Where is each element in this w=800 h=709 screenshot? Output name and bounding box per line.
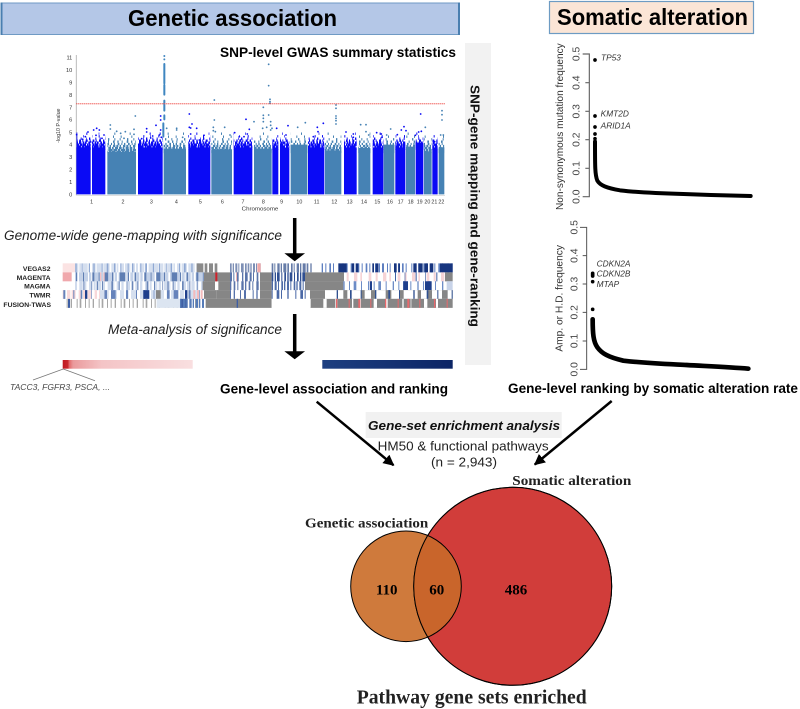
steel-blue chromosome columns (107, 145, 444, 194)
axis numbers: 0 (69, 192, 72, 198)
chart: non-synonymous mutation frequency: 0.0 (571, 189, 582, 204)
x axis title: Chromosome (242, 207, 278, 213)
panel: gene-set enrichment analysis (366, 412, 562, 470)
chromosome labels: 15 (374, 200, 380, 206)
chart: amplification or homozygous deletion frequency: CDKN2A (597, 258, 631, 268)
row: VEGAS2 (63, 254, 453, 281)
chart: amplification or homozygous deletion frequency: Amp. or H.D. frequency (554, 244, 565, 352)
row: MAGENTA (63, 263, 453, 290)
side panel: SNP-gene mapping and gene-ranking: SNP-gene mapping and gene-ranking (468, 85, 482, 327)
chromosome labels: 20 (424, 200, 430, 206)
row: FUSION-TWAS (67, 290, 453, 317)
chart: non-synonymous mutation frequency: TP53 (601, 53, 621, 63)
chromosome labels: 6 (221, 200, 224, 206)
ranking bar: top genes (63, 360, 193, 369)
axis numbers: 1 (69, 180, 72, 186)
heatmap labels: MAGMA (24, 284, 51, 291)
chromosome labels: 9 (280, 200, 283, 206)
heatmap labels: MAGENTA (17, 275, 51, 282)
axis numbers: 8 (69, 93, 72, 99)
axis numbers: 5 (69, 130, 72, 136)
chart: amplification or homozygous deletion frequency: 0.3 (570, 277, 581, 291)
y axis title: -log10 P-value (56, 108, 62, 143)
text: Gene-level association and ranking: Gene-level association and ranking (220, 382, 448, 396)
venn label: Genetic association: Genetic association (305, 517, 429, 532)
axis numbers: 10 (66, 68, 72, 74)
ranking bar: bottom genes (322, 360, 453, 369)
chart: amplification or homozygous deletion frequency: 0.4 (570, 248, 581, 263)
speckled tops of steel columns (76, 134, 444, 152)
chromosome labels: 21 (431, 200, 437, 206)
heatmap labels: VEGAS2 (23, 266, 51, 273)
chromosome labels: 3 (150, 200, 153, 206)
chromosome labels: 18 (408, 200, 414, 206)
genome-wide significance line (76, 102, 445, 106)
chromosome labels: 16 (387, 200, 393, 206)
panel: gene-set enrichment analysis: (n = 2,943) (431, 455, 497, 470)
axis numbers: 7 (69, 105, 72, 111)
chart: non-synonymous mutation frequency: 0.2 (571, 132, 582, 147)
heatmap labels: TWMR (29, 293, 51, 300)
chromosome labels: 5 (199, 200, 202, 206)
chart: amplification or homozygous deletion frequency: 0.1 (570, 334, 581, 348)
chart: non-synonymous mutation frequency: 0.3 (571, 104, 582, 119)
scattered points above blue columns (77, 114, 435, 143)
venn diagram: 110 (376, 582, 398, 598)
venn diagram (351, 487, 612, 685)
row: MAGMA (75, 272, 453, 299)
venn diagram: 486 (505, 582, 528, 598)
chromosome labels: 4 (175, 200, 178, 206)
chart: non-synonymous mutation frequency: KMT2D (601, 108, 629, 118)
chromosome labels: 8 (262, 200, 265, 206)
chart: amplification or homozygous deletion frequency (554, 220, 748, 377)
blue chromosome columns (76, 143, 438, 194)
row: TWMR (63, 281, 453, 308)
arrow: mapping to ranking (290, 314, 300, 357)
text: top genes: TACC3, FGFR3, PSCA, ... (10, 383, 110, 392)
axis numbers: 9 (69, 80, 72, 86)
panel: gene-set enrichment analysis: HM50 & functional pathways (378, 439, 549, 454)
chromosome labels: 10 (296, 200, 302, 206)
chromosome labels: 19 (417, 200, 423, 206)
heading: SNP-level GWAS summary statistics: SNP-level GWAS summary statistics (220, 44, 456, 60)
text: Meta-analysis of significance: Meta-analysis of significance (108, 322, 282, 337)
chart: non-synonymous mutation frequency: 0.5 (571, 47, 582, 61)
callout lines to top genes (33, 369, 95, 381)
scattered points above steel columns (110, 64, 443, 138)
side panel: SNP-gene mapping and gene-ranking (465, 43, 491, 365)
chart: amplification or homozygous deletion frequency: 0.0 (570, 362, 581, 377)
chromosome labels: 11 (314, 200, 319, 206)
header: Somatic alteration: Somatic alteration (557, 4, 748, 30)
chart: amplification or homozygous deletion frequency: MTAP (597, 279, 620, 289)
chart: amplification or homozygous deletion frequency: 0.2 (570, 305, 581, 320)
chart: amplification or homozygous deletion frequency: CDKN2B (597, 269, 631, 279)
axis numbers: 4 (69, 143, 72, 149)
heatmap of gene-level significance (63, 268, 453, 303)
chromosome labels: 12 (331, 200, 337, 206)
arrow: GWAS to gene mapping (290, 218, 300, 259)
chart: non-synonymous mutation frequency: 0.1 (571, 161, 582, 176)
heatmap labels (3, 266, 51, 309)
caption: Pathway gene sets enriched: Pathway gene sets enriched (357, 686, 587, 708)
chromosome labels: 7 (242, 200, 245, 206)
arrow: somatic to enrichment (535, 401, 612, 464)
panel: gene-set enrichment analysis: Gene-set enrichment analysis (368, 418, 560, 433)
text: Gene-level ranking by somatic alteration rate: Gene-level ranking by somatic alteration rate (508, 381, 798, 396)
chart: Manhattan plot (56, 55, 445, 213)
chromosome labels: 22 (438, 200, 444, 206)
chart: non-synonymous mutation frequency: 0.4 (571, 75, 582, 90)
chromosome labels: 17 (398, 200, 404, 206)
chart: non-synonymous mutation frequency: ARID1A (600, 121, 631, 131)
chart: non-synonymous mutation frequency (555, 43, 751, 210)
arrow: association to enrichment (317, 402, 394, 465)
chromosome labels: 13 (347, 200, 353, 206)
text: Genome-wide gene-mapping with significance: Genome-wide gene-mapping with significance (4, 228, 282, 243)
axis numbers: 3 (69, 155, 72, 161)
chromosome labels (90, 200, 444, 206)
header: Genetic association (2, 2, 459, 35)
chart: non-synonymous mutation frequency: Non-synonymous mutation frequency (555, 43, 566, 210)
axis numbers: 6 (69, 118, 72, 124)
speckled tops of blue columns (76, 134, 444, 149)
chromosome labels: 2 (122, 200, 125, 206)
axis numbers (66, 56, 72, 198)
header: Genetic association: Genetic association (128, 5, 337, 31)
venn diagram: 60 (429, 582, 444, 598)
peak column on chromosome 4 (163, 56, 164, 137)
chart: amplification or homozygous deletion frequency: 0.5 (570, 220, 581, 235)
axis numbers: 11 (66, 56, 72, 62)
chromosome labels: 14 (361, 200, 367, 206)
axis numbers: 2 (69, 167, 72, 173)
venn label: Somatic alteration: Somatic alteration (512, 474, 632, 489)
chromosome labels: 1 (90, 200, 93, 206)
heatmap labels: FUSION-TWAS (3, 302, 51, 309)
